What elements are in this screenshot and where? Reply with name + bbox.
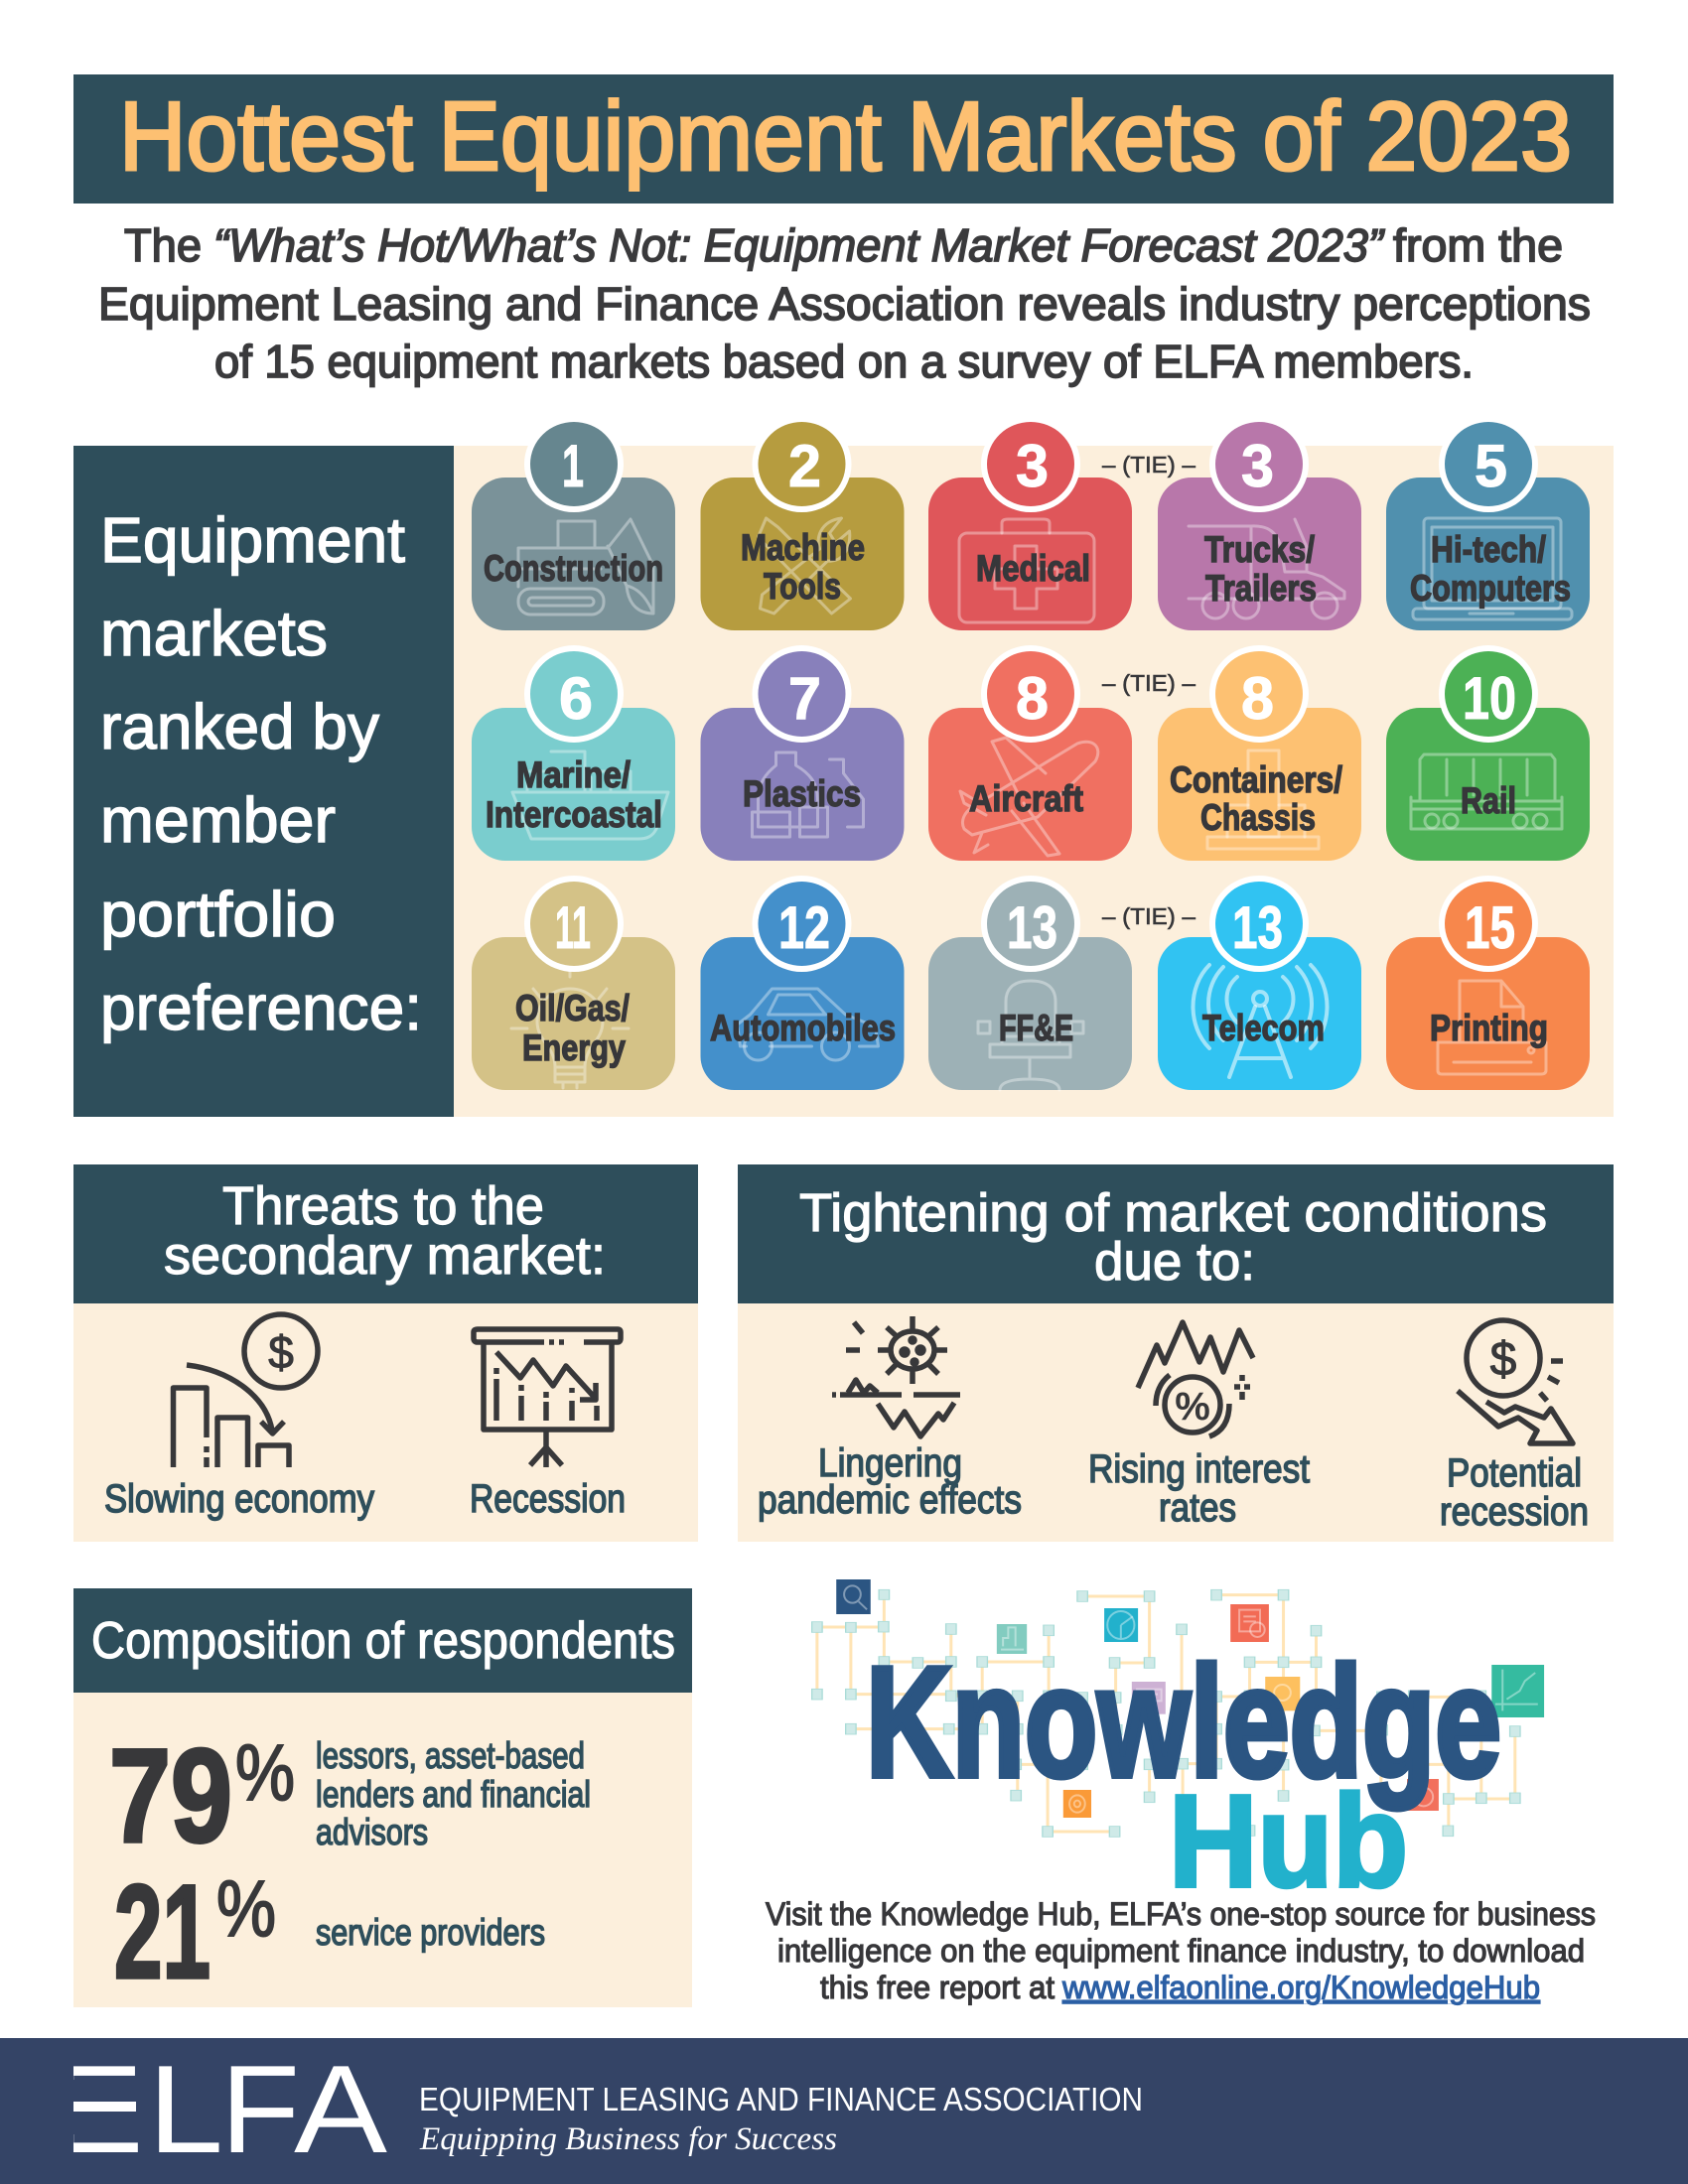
- tile: Plastics rank 7: Plastics: [743, 773, 861, 814]
- tile: FF&E rank 13: [928, 876, 1132, 1090]
- knowledge hub description: intelligence on the equipment finance industry, to download: [777, 1933, 1585, 1969]
- text: lessors: lessors, asset-based: [316, 1735, 585, 1776]
- tile: Machine Tools rank 2: [701, 416, 904, 630]
- panel: tightening of market conditions: [738, 1164, 1614, 1542]
- label: rising interest rates: Rising interest: [1088, 1447, 1310, 1491]
- heading: tightening: Tightening of market conditions: [799, 1183, 1547, 1243]
- tile: Printing rank 15: Printing: [1430, 1008, 1548, 1048]
- tie label row 3: – (TIE) –: [1102, 903, 1196, 929]
- tile: Medical rank 3: [928, 416, 1132, 630]
- heading: tightening: [799, 1183, 1547, 1292]
- heading: threats: [164, 1176, 606, 1286]
- tile: Construction rank 1: [472, 416, 675, 630]
- tile: Aircraft rank 8: [928, 645, 1132, 861]
- heading: composition: Composition of respondents: [91, 1612, 675, 1670]
- heading: tightening: due to:: [1094, 1232, 1255, 1292]
- tile: Containers/Chassis rank 8: Containers/: [1170, 759, 1342, 800]
- knowledge hub description: www.elfaonline.org/KnowledgeHub: [1061, 1970, 1540, 2005]
- icon: potential recession: [1458, 1320, 1573, 1443]
- label: potential recession: [1440, 1451, 1589, 1534]
- icon: recession chart: [474, 1329, 621, 1467]
- icon: interest rates: [1138, 1322, 1253, 1436]
- network nodes and icons: [812, 1579, 1544, 1837]
- stat: 79 percent: %: [235, 1728, 295, 1817]
- panel: composition of respondents: [73, 1588, 692, 2007]
- tile: Printing rank 15: [1386, 876, 1590, 1090]
- label: slowing economy: Slowing economy: [104, 1477, 374, 1521]
- icon: pandemic: [832, 1316, 960, 1436]
- heading: threats: Threats to the: [222, 1176, 544, 1236]
- tile: Telecom rank 13: 13: [1232, 894, 1283, 961]
- stat: 21 percent: %: [216, 1864, 276, 1953]
- tile: Plastics rank 7: [701, 645, 904, 861]
- title banner: Hottest Equipment Markets of 2023: [119, 81, 1572, 191]
- ELFA logo: L: [148, 2039, 223, 2179]
- tile: Trucks/Trailers rank 3: 3: [1241, 433, 1274, 499]
- tile: Containers/Chassis rank 8: Chassis: [1200, 797, 1316, 838]
- tile: Hi-tech/Computers rank 5: Computers: [1410, 568, 1571, 609]
- ELFA logo: A: [294, 2039, 387, 2179]
- tile: Plastics rank 7: 7: [788, 665, 821, 732]
- intro text: from the: [1393, 219, 1563, 271]
- icon: interest rates: %: [1175, 1385, 1210, 1429]
- label: pandemic effects: [758, 1441, 1022, 1522]
- tile: Marine/Intercoastal rank 6: Marine/: [516, 754, 631, 795]
- label: potential recession: Potential: [1447, 1451, 1582, 1495]
- tie label row 1: – (TIE) –: [1102, 452, 1196, 478]
- tile: Aircraft rank 8: Aircraft: [969, 778, 1083, 819]
- tile: Machine Tools rank 2: Tools: [764, 566, 841, 607]
- footer band: [0, 2038, 1688, 2184]
- tile: Aircraft rank 8: 8: [1016, 665, 1049, 732]
- label: pandemic effects: pandemic effects: [758, 1478, 1022, 1522]
- tile: Medical rank 3: Medical: [976, 548, 1090, 589]
- text: lessors: lenders and financial: [316, 1774, 591, 1815]
- intro text: The: [124, 219, 202, 271]
- knowledge hub description: this free report at: [820, 1970, 1055, 2005]
- label: potential recession: recession: [1440, 1490, 1589, 1534]
- text: lessors: advisors: [316, 1812, 428, 1852]
- ELFA logo: F: [220, 2039, 300, 2179]
- intro text: “What’s Hot/What’s Not: Equipment Market Forecast 2023”: [213, 219, 1386, 271]
- tile: FF&E rank 13: FF&E: [999, 1008, 1073, 1048]
- stat: 79 percent: 79: [109, 1722, 232, 1870]
- tile: Hi-tech/Computers rank 5: [1386, 416, 1590, 630]
- tile: FF&E rank 13: 13: [1007, 894, 1057, 961]
- tile: Automobiles rank 12: [701, 876, 904, 1090]
- tile: Printing rank 15: 15: [1465, 894, 1515, 961]
- panel: ranking label: Equipment: [100, 504, 405, 576]
- intro text: of 15 equipment markets based on a survey of ELFA members.: [214, 336, 1474, 387]
- panel: ranking label: portfolio: [100, 879, 336, 950]
- tile: Marine/Intercoastal rank 6: 6: [559, 665, 593, 732]
- tile: Containers/Chassis rank 8: [1158, 645, 1361, 861]
- tile: Hi-tech/Computers rank 5: Hi-tech/: [1431, 529, 1546, 570]
- tile: Marine/Intercoastal rank 6: [472, 645, 675, 861]
- stat: 21 percent: 21: [114, 1858, 211, 2006]
- label: pandemic effects: Lingering: [818, 1441, 962, 1485]
- tile: Automobiles rank 12: Automobiles: [710, 1008, 896, 1048]
- label: rising interest rates: [1088, 1447, 1310, 1530]
- tile: Telecom rank 13: [1158, 876, 1361, 1090]
- panel: ranking label: member: [100, 784, 336, 856]
- label: rising interest rates: rates: [1159, 1486, 1236, 1530]
- tile: Rail rank 10: Rail: [1461, 780, 1516, 821]
- panel: ranking label: ranked by: [100, 691, 379, 762]
- ELFA logo: [49, 2039, 387, 2179]
- tile: Machine Tools rank 2: 2: [788, 433, 821, 499]
- tile: Rail rank 10: 10: [1463, 665, 1516, 732]
- logo word: Knowledge: Knowledge: [866, 1635, 1501, 1810]
- tile: Construction rank 1: Construction: [484, 548, 663, 589]
- panel: ranking label: preference:: [100, 972, 422, 1043]
- tile: Trucks/Trailers rank 3: Trucks/: [1204, 529, 1315, 570]
- tie label row 2: – (TIE) –: [1102, 670, 1196, 696]
- tile: Medical rank 3: 3: [1016, 433, 1049, 499]
- text: service providers: service providers: [316, 1912, 545, 1953]
- tile: Construction rank 1: 1: [562, 433, 584, 499]
- panel: threats to the secondary market: [73, 1164, 698, 1542]
- panel: ranking background: [454, 446, 1614, 1117]
- tile: Oil/Gas/Energy rank 11: [472, 876, 675, 1090]
- logo word: Hub: Hub: [1169, 1768, 1408, 1914]
- tile: Marine/Intercoastal rank 6: Intercoastal: [486, 794, 662, 835]
- knowledge hub logo: [812, 1579, 1544, 1914]
- icon: slowing economy: [173, 1314, 318, 1467]
- tile: Oil/Gas/Energy rank 11: 11: [555, 894, 591, 961]
- knowledge hub description: [766, 1896, 1596, 2005]
- tile: Rail rank 10: [1386, 645, 1590, 861]
- panel: ranking label: markets: [100, 598, 328, 669]
- tile: Telecom rank 13: Telecom: [1202, 1008, 1325, 1048]
- intro text: Equipment Leasing and Finance Association reveals industry perceptions: [98, 278, 1591, 330]
- panel: ranking label: [73, 446, 454, 1117]
- tile: Machine Tools rank 2: Machine: [741, 527, 865, 568]
- tile: Trucks/Trailers rank 3: Trailers: [1205, 568, 1317, 609]
- tile: Oil/Gas/Energy rank 11: Energy: [522, 1027, 626, 1068]
- knowledge hub description: Visit the Knowledge Hub, ELFA’s one-stop source for business: [766, 1896, 1596, 1932]
- tile: Containers/Chassis rank 8: 8: [1241, 665, 1274, 732]
- icon: slowing economy: $: [268, 1326, 294, 1378]
- tagline: Equipping Business for Success: [419, 2121, 837, 2157]
- tile: Oil/Gas/Energy rank 11: Oil/Gas/: [515, 988, 630, 1028]
- intro text: [98, 219, 1591, 387]
- organisation name: EQUIPMENT LEASING AND FINANCE ASSOCIATION: [419, 2081, 1143, 2117]
- tile: Hi-tech/Computers rank 5: 5: [1475, 433, 1507, 499]
- label: recession: Recession: [470, 1477, 626, 1521]
- text: lessors: [316, 1735, 591, 1852]
- icon: potential recession: $: [1490, 1333, 1516, 1386]
- tile: Automobiles rank 12: 12: [778, 894, 830, 961]
- ELFA logo: E: [49, 2039, 144, 2179]
- heading: threats: secondary market:: [164, 1226, 606, 1286]
- tile: Trucks/Trailers rank 3: [1158, 416, 1361, 630]
